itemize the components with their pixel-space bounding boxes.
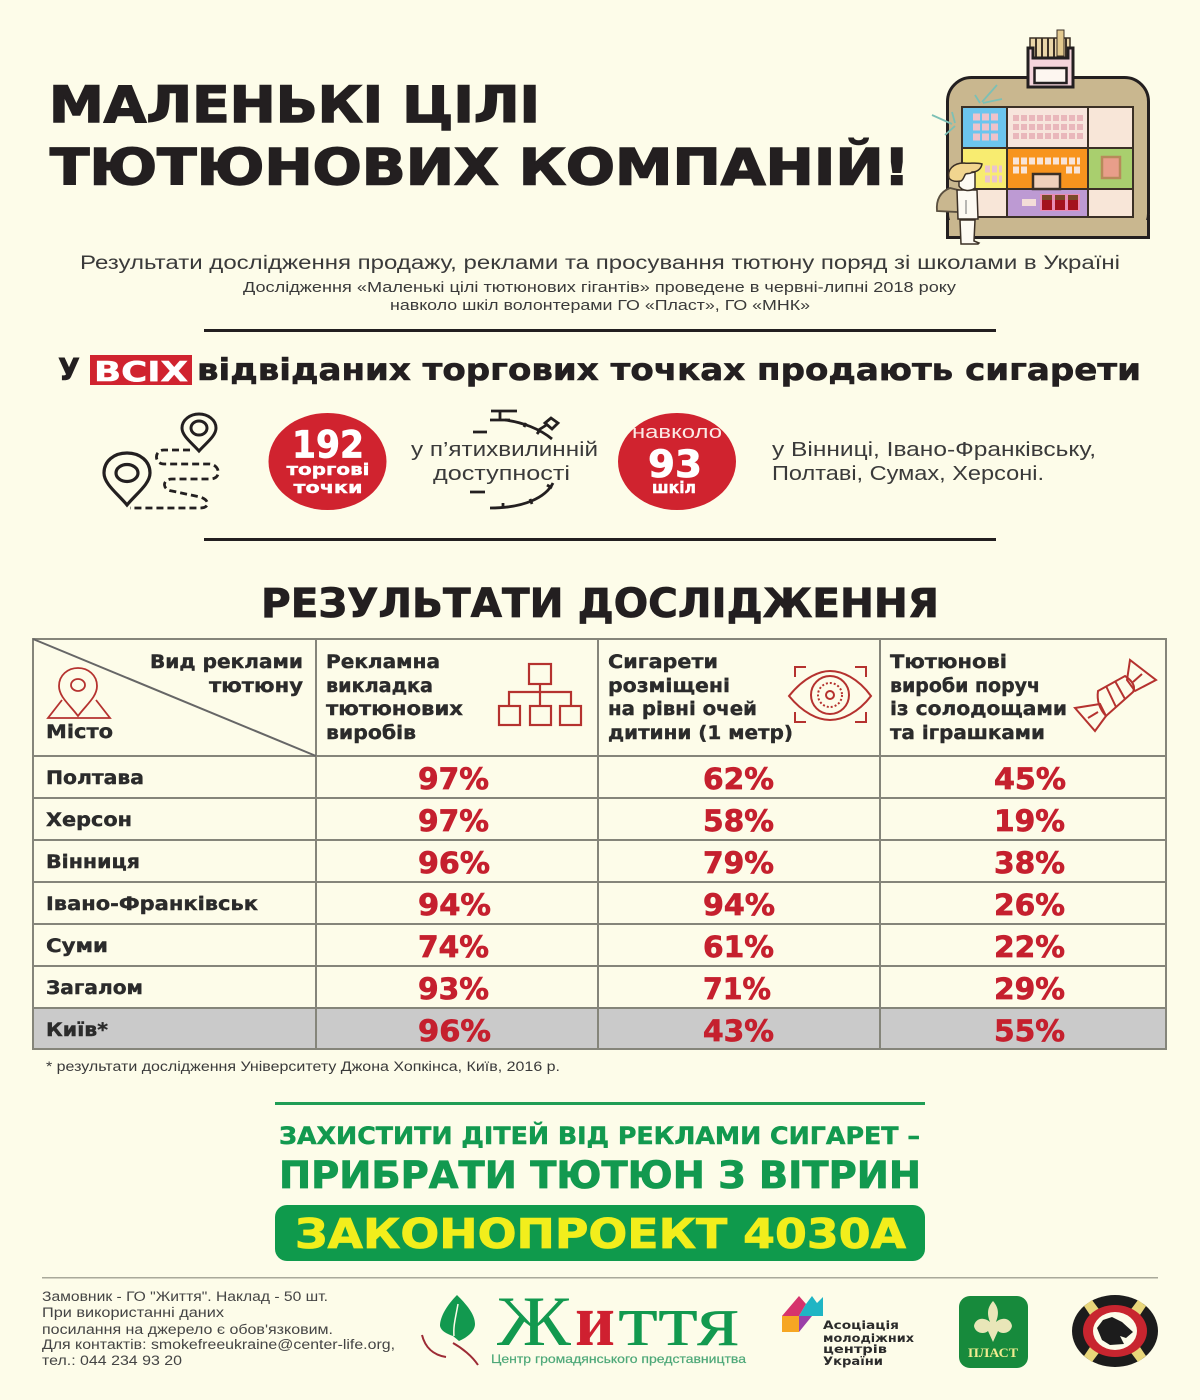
footer contact text: Замовник - ГО "Життя". Наклад - 50 шт. (42, 1289, 328, 1304)
stat: around 93 schools (618, 413, 736, 510)
heading: all outlets sell cigarettes: У (58, 353, 80, 388)
column header: near sweets and toys: із солодощами (890, 698, 1067, 720)
five-minute reach text (411, 439, 598, 485)
icon: candy (1075, 660, 1156, 731)
row: Sumy: 74% (418, 930, 489, 964)
footer contact text (42, 1289, 395, 1368)
icon: map pin (48, 668, 110, 718)
column header: eye level: на рівні очей (608, 698, 757, 720)
row: Vinnytsia: Вінниця (46, 851, 140, 873)
row: Overall (46, 972, 1065, 1006)
study note (243, 279, 957, 314)
row: Vinnytsia: 79% (703, 846, 774, 880)
results table (33, 639, 1166, 1049)
row: Kyiv: 96% (418, 1014, 491, 1048)
logo: Zhyttia (422, 1280, 746, 1366)
column header: display: Рекламна (326, 651, 440, 673)
logo: Plast (959, 1296, 1028, 1368)
row: Poltava (46, 762, 1066, 796)
row: Kyiv: 43% (703, 1014, 774, 1048)
row: Kherson (46, 804, 1065, 838)
footer contact text: При використанні даних (42, 1305, 224, 1320)
study note: Дослідження «Маленькі цілі тютюнових гігантів» проведене в червні-липні 2018 року (243, 279, 957, 296)
footer contact text: тел.: 044 234 93 20 (42, 1353, 182, 1368)
row: Ivano-Frankivsk: 26% (994, 888, 1065, 922)
column header: eye level: дитини (1 метр) (608, 722, 793, 744)
row: Ivano-Frankivsk: 94% (703, 888, 775, 922)
row: Ivano-Frankivsk: Івано-Франківськ (46, 893, 258, 915)
row: Vinnytsia: 38% (994, 846, 1065, 880)
stat: 192 outlets: точки (294, 478, 362, 497)
row: Overall: 93% (418, 972, 489, 1006)
row: Sumy (46, 930, 1065, 964)
row: Overall: Загалом (46, 977, 143, 999)
title: МАЛЕНЬКІ ЦІЛІ (49, 76, 540, 134)
row: Kherson: 97% (418, 804, 489, 838)
call to action (279, 1121, 921, 1197)
heading: all outlets sell cigarettes: ВСІХ (94, 355, 189, 388)
row: Sumy: 61% (703, 930, 774, 964)
column header: display: викладка (326, 675, 433, 697)
study note: навколо шкіл волонтерами ГО «Пласт», ГО «МНК» (390, 297, 810, 314)
cities text (772, 439, 1096, 485)
row: Overall: 71% (703, 972, 771, 1006)
call to action: ЗАХИСТИТИ ДІТЕЙ ВІД РЕКЛАМИ СИГАРЕТ – (279, 1121, 920, 1150)
icon: stopwatch arcs (470, 411, 558, 508)
row: Kherson: Херсон (46, 809, 132, 831)
row: Ivano-Frankivsk (46, 888, 1065, 922)
stat: around 93 schools: шкіл (652, 478, 696, 497)
logo: Plast: ПЛАСТ (968, 1346, 1019, 1360)
stat: around 93 schools: навколо (632, 422, 722, 442)
logo: Zhyttia: Ж (497, 1283, 571, 1361)
row: Kherson: 19% (994, 804, 1065, 838)
column header: display: тютюнових (326, 698, 463, 720)
table corner header (46, 651, 304, 743)
row: Kyiv (46, 1014, 1065, 1048)
stat: 192 outlets (268, 413, 386, 510)
row: Vinnytsia (46, 846, 1065, 880)
row: Ivano-Frankivsk: 94% (418, 888, 491, 922)
column header: eye level: Сигарети (608, 651, 718, 673)
call to action: ПРИБРАТИ ТЮТЮН З ВІТРИН (279, 1154, 921, 1197)
stat: around 93 schools: 93 (648, 443, 702, 486)
bill number banner: ЗАКОНОПРОЕКТ 4030А (295, 1210, 906, 1258)
logo: youth centres association: молодіжних (823, 1331, 915, 1345)
logo: Zhyttia: ття (618, 1280, 739, 1362)
logo: round badge (1072, 1295, 1158, 1367)
column header: eye level (608, 651, 871, 744)
illustration: shop shelf with cigarettes and schoolboy (932, 30, 1148, 244)
title: ТЮТЮНОВИХ КОМПАНІЙ! (50, 138, 910, 196)
row: Poltava: Полтава (46, 767, 144, 789)
logo: youth centres association: України (823, 1354, 883, 1368)
icon: eye (789, 667, 871, 722)
icon: display hierarchy (499, 664, 581, 725)
table corner header: Вид реклами (150, 651, 303, 673)
stat: 192 outlets: торгові (286, 460, 370, 479)
cities text: Полтаві, Сумах, Херсоні. (772, 463, 1044, 485)
row: Kyiv: 55% (994, 1014, 1065, 1048)
logo: youth centres association: центрів (823, 1342, 887, 1356)
footer contact text: посилання на джерело є обов'язковим. (42, 1322, 333, 1337)
heading: research results: РЕЗУЛЬТАТИ ДОСЛІДЖЕННЯ (261, 581, 939, 627)
table footnote: * результати дослідження Університету Джона Хопкінса, Київ, 2016 р. (46, 1059, 560, 1074)
row: Vinnytsia: 96% (418, 846, 490, 880)
row: Sumy: Суми (46, 935, 108, 957)
five-minute reach text: доступності (433, 463, 570, 485)
row: Poltava: 62% (703, 762, 774, 796)
column header: eye level: розміщені (608, 675, 730, 697)
column header: near sweets and toys: вироби поруч (890, 675, 1040, 697)
heading: all outlets sell cigarettes: відвіданих торгових точках продають сигарети (197, 353, 1141, 388)
five-minute reach text: у п’ятихвилинній (411, 439, 598, 461)
icon: cigarette pack (1028, 30, 1073, 87)
icon: schoolboy (937, 163, 982, 244)
row: Kherson: 58% (703, 804, 774, 838)
column header: near sweets and toys: Тютюнові (890, 651, 1007, 673)
logo: youth centres association (782, 1296, 915, 1368)
logo: Zhyttia: и (575, 1280, 615, 1362)
row: Overall: 29% (994, 972, 1065, 1006)
row: Poltava: 97% (418, 762, 489, 796)
column header: display: виробів (326, 722, 416, 744)
table corner header: тютюну (209, 675, 304, 697)
column header: display (326, 651, 581, 744)
cities text: у Вінниці, Івано-Франківську, (772, 439, 1096, 461)
column header: near sweets and toys (890, 651, 1156, 744)
row: Poltava: 45% (994, 762, 1066, 796)
row: Kyiv: Київ* (46, 1019, 108, 1041)
icon: route between map pins (104, 414, 218, 508)
title (49, 76, 910, 196)
stat: 192 outlets: 192 (292, 424, 364, 466)
row: Sumy: 22% (994, 930, 1065, 964)
logo: Zhyttia: Центр громадянського представництва (491, 1352, 746, 1366)
column header: near sweets and toys: та іграшками (890, 722, 1045, 744)
subtitle: Результати дослідження продажу, реклами та просування тютюну поряд зі школами в Україні (80, 253, 1120, 274)
logo: youth centres association: Асоціація (823, 1318, 899, 1332)
footer contact text: Для контактів: smokefreeukraine@center-life.org, (42, 1337, 395, 1352)
table corner header: Місто (46, 721, 113, 743)
